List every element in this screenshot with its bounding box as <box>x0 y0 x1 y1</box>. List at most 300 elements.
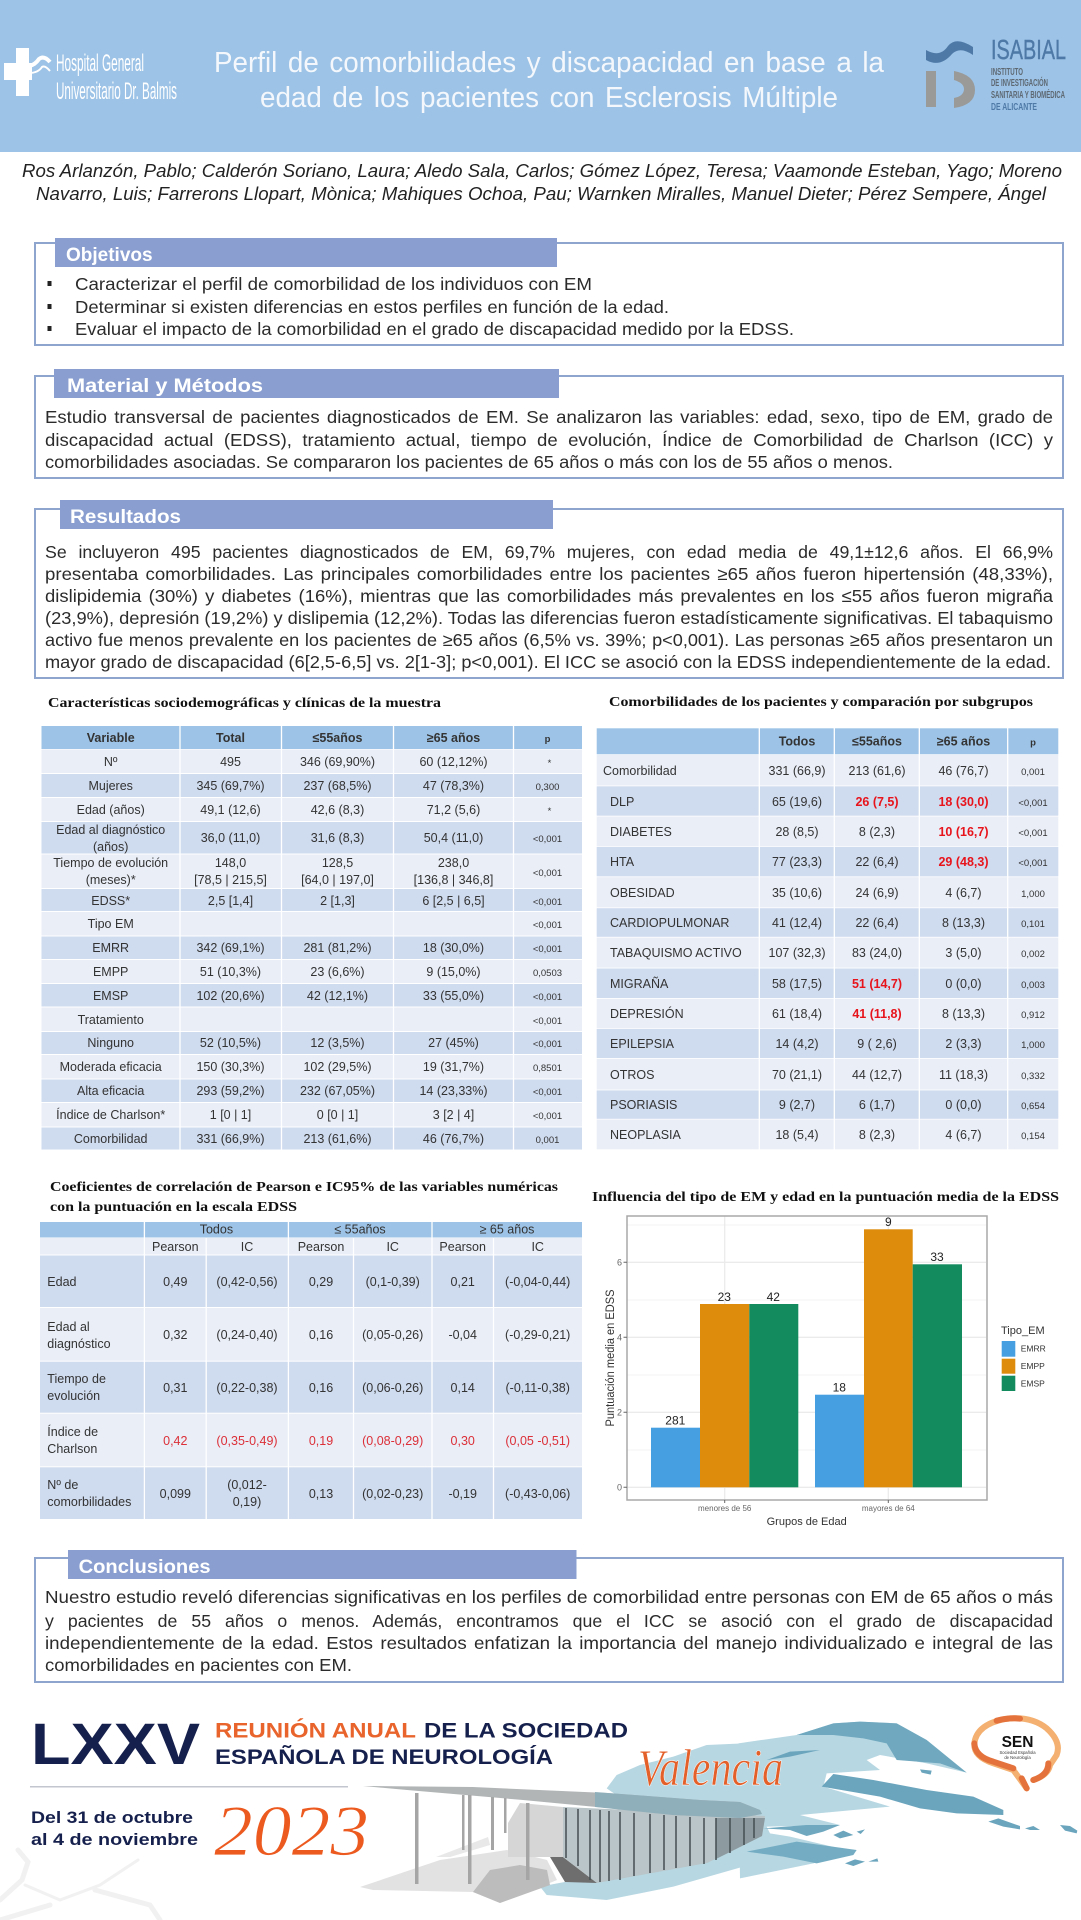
row: TABAQUISMO ACTIVO: 0,002 <box>1021 949 1045 960</box>
row: DIABETES: 8 (2,3) <box>859 825 895 839</box>
row: Edad al diagnóstico: 0,16 <box>309 1328 333 1342</box>
row: Edad: (0,42-0,56) <box>216 1275 278 1289</box>
row: CARDIOPULMONAR: 8 (13,3) <box>942 916 985 930</box>
row: DEPRESIÓN <box>597 999 1058 1028</box>
row: Edad <box>40 1256 582 1307</box>
row: Alta eficacia: Alta eficacia <box>77 1084 144 1098</box>
row: OTROS: 11 (18,3) <box>939 1068 988 1082</box>
row: Edad al diagnóstico: -0,04 <box>448 1328 477 1342</box>
sub header row <box>40 1238 582 1254</box>
title: edad de los pacientes con Esclerosis Múltiple <box>260 82 838 114</box>
row: Edad: (-0,04-0,44) <box>505 1275 570 1289</box>
row: Moderada eficacia: 150 (30,3%) <box>196 1060 265 1074</box>
title <box>214 47 885 114</box>
header banner <box>0 0 1081 152</box>
row: DIABETES: 10 (16,7) <box>938 825 989 839</box>
row: Tiempo de evolución: [64,0 | 197,0] <box>301 873 374 887</box>
row: Alta eficacia: <0,001 <box>533 1087 562 1098</box>
row: Edad al diagnóstico: (-0,29-0,21) <box>505 1328 570 1342</box>
objectives list <box>48 274 794 339</box>
bars: menores de 56: 281 <box>665 1414 686 1428</box>
row: MIGRAÑA: 0 (0,0) <box>945 977 982 991</box>
row: EPILEPSIA: EPILEPSIA <box>610 1037 675 1051</box>
header row: Total <box>216 731 245 745</box>
group header row: ≥ 65 años <box>480 1222 534 1236</box>
row: EMSP: <0,001 <box>533 992 562 1003</box>
title: LXXV reunión anual: REUNIÓN ANUAL <box>215 1718 416 1742</box>
row: OTROS: 70 (21,1) <box>772 1068 822 1082</box>
row: EDSS: 6 [2,5 | 6,5] <box>422 894 485 908</box>
Valencia lettering: Valencia <box>638 1740 783 1797</box>
authors: Navarro, Luis; Farrerons Llopart, Mònica; Mahiques Ochoa, Pau; Warnken Miralles, Manuel Dieter; Pérez Sempere, Ángel <box>36 183 1047 204</box>
row: Tiempo de evolución: 0,14 <box>451 1381 475 1395</box>
title: LXXV reunión anual: DE LA SOCIEDAD <box>424 1720 628 1742</box>
header row: Variable <box>87 731 135 745</box>
y axis: 6 <box>617 1258 622 1268</box>
row: Tiempo de evolución: (0,06-0,26) <box>362 1381 423 1395</box>
row: DEPRESIÓN: DEPRESIÓN <box>610 1006 684 1021</box>
conclusions text: independientemente de la edad. Estos resultados enfatizan la importancia del manejo individualizado e integral de las <box>45 1633 1053 1653</box>
heading: tabla comorbilidades: Comorbilidades de los pacientes y comparación por subgrupos <box>609 695 1034 710</box>
row: EMRR: <0,001 <box>533 944 562 955</box>
panel: conclusiones <box>35 1550 1063 1682</box>
conclusions text: y pacientes de 55 años o menos. Además, encontramos que el ICC se asoció con el grado de discapacidad <box>45 1611 1053 1631</box>
row: Edad al diagnóstico: Edad al diagnóstico <box>56 823 165 837</box>
row: OBESIDAD: 24 (6,9) <box>855 886 899 900</box>
bars: mayores de 64: 9 <box>885 1215 892 1229</box>
row: Tiempo de evolución: (-0,11-0,38) <box>506 1381 570 1395</box>
row: Comorbilidad: 213 (61,6) <box>849 764 905 778</box>
row: Tipo EM: <0,001 <box>533 920 562 931</box>
row: DEPRESIÓN: 0,912 <box>1021 1010 1045 1021</box>
row: Tiempo de evolución: Tiempo de evolución <box>53 856 168 870</box>
legend: Tipo_EM <box>1001 1325 1045 1337</box>
row: EDSS: EDSS* <box>91 894 130 908</box>
row: Alta eficacia <box>42 1080 582 1102</box>
row: Tiempo de evolución: <0,001 <box>533 868 562 879</box>
row: Tiempo de evolución: (0,22-0,38) <box>216 1381 278 1395</box>
y axis: 4 <box>617 1332 622 1342</box>
legend: EMSP <box>1021 1378 1045 1388</box>
logo: SEN: SEN <box>1002 1734 1033 1751</box>
row: OBESIDAD: 35 (10,6) <box>772 886 822 900</box>
row: DLP: <0,001 <box>1018 798 1048 809</box>
row: OTROS <box>597 1059 1058 1090</box>
dates: al 4 de noviembre <box>31 1830 198 1849</box>
row: EMRR: EMRR <box>92 941 129 955</box>
sub header row: Pearson <box>439 1240 486 1254</box>
results text: (23,9%), depresión (19,2%) y dislipemia (12,2%). Todas las diferencias fueron estadísticamente significativas. El tabaquismo <box>45 608 1053 628</box>
row: EMPP <box>42 960 582 983</box>
row: HTA: HTA <box>610 855 635 869</box>
row: Ninguno: <0,001 <box>533 1039 562 1050</box>
row: Alta eficacia: 293 (59,2%) <box>196 1084 265 1098</box>
row: Tiempo de evolución: [136,8 | 346,8] <box>414 873 493 887</box>
footer banner: congress <box>0 1712 1077 1920</box>
row: EMSP: 42 (12,1%) <box>307 989 368 1003</box>
row: Nº: Nº <box>104 755 118 769</box>
heading: tabla correlación <box>50 1180 559 1215</box>
row: Índice de Charlson: 0,42 <box>163 1434 188 1448</box>
row: Mujeres <box>42 774 582 797</box>
row: EMSP: EMSP <box>93 989 128 1003</box>
bars: menores de 56 <box>651 1290 798 1487</box>
row: NEOPLASIA: NEOPLASIA <box>610 1128 682 1142</box>
row: Índice de Charlson: 0,30 <box>451 1434 475 1448</box>
row: Comorbilidad: 0,001 <box>536 1135 559 1146</box>
row: HTA: 22 (6,4) <box>855 855 899 869</box>
row: DEPRESIÓN: 8 (13,3) <box>942 1007 985 1021</box>
row: Edad al diagnóstico <box>40 1308 582 1361</box>
row: EPILEPSIA: 14 (4,2) <box>775 1037 819 1051</box>
row: HTA: <0,001 <box>1018 858 1048 869</box>
row: Tiempo de evolución: 238,0 <box>438 856 469 870</box>
row: CARDIOPULMONAR: 0,101 <box>1021 919 1045 930</box>
row: EMRR: 18 (30,0%) <box>423 941 484 955</box>
row: Nº: 60 (12,12%) <box>419 755 488 769</box>
row: Edad al diagnóstico: Edad al <box>47 1320 90 1334</box>
row: MIGRAÑA: 58 (17,5) <box>772 977 822 991</box>
row: Tiempo de evolución: [78,5 | 215,5] <box>194 873 267 887</box>
row: Edad: 0,29 <box>309 1275 333 1289</box>
row: DIABETES: DIABETES <box>610 825 672 839</box>
row: HTA: 77 (23,3) <box>772 855 822 869</box>
legend: EMRR <box>1021 1344 1046 1354</box>
y axis: 0 <box>617 1482 622 1492</box>
row: EMSP: 102 (20,6%) <box>196 989 265 1003</box>
row: Edad al diagnóstico: 31,6 (8,3) <box>311 831 364 845</box>
table: comorbilidades <box>597 728 1058 1149</box>
row: PSORIASIS: PSORIASIS <box>610 1098 677 1112</box>
title: Perfil de comorbilidades y discapacidad en base a la <box>214 47 885 79</box>
row: Mujeres: 345 (69,7%) <box>196 779 265 793</box>
row: EDSS <box>42 889 582 911</box>
results text: mayor grado de discapacidad (6[2,5-6,5] vs. 2[1-3]; p<0,001). El ICC se asoció con la EDSS independientemente de la edad. <box>45 652 1051 672</box>
brain vein watermark <box>0 1850 160 1920</box>
sub header row: Pearson <box>152 1240 199 1254</box>
row: Tiempo de evolución <box>42 854 582 888</box>
header row: ≤55años <box>313 731 363 745</box>
row: Tiempo de evolución <box>40 1362 582 1413</box>
row: OBESIDAD: 4 (6,7) <box>945 886 982 900</box>
row: Comorbilidad: 213 (61,6%) <box>303 1132 372 1146</box>
row: Moderada eficacia: 0,8501 <box>533 1063 562 1074</box>
row: TABAQUISMO ACTIVO: 83 (24,0) <box>852 946 902 960</box>
row: Comorbilidad: Comorbilidad <box>74 1132 148 1146</box>
row: HTA: 29 (48,3) <box>938 855 989 869</box>
row: Moderada eficacia: 102 (29,5%) <box>303 1060 372 1074</box>
row: TABAQUISMO ACTIVO: 3 (5,0) <box>945 946 982 960</box>
row: EPILEPSIA <box>597 1029 1058 1058</box>
row: Nº de comorbilidades: (0,02-0,23) <box>362 1487 423 1501</box>
row: DLP <box>597 786 1058 816</box>
row: MIGRAÑA <box>597 968 1058 998</box>
row: Índice de Charlson: Índice de Charlson* <box>56 1107 165 1122</box>
building illustration <box>360 1786 765 1903</box>
logo: ISABIAL <box>926 34 1066 113</box>
row: Índice de Charlson: (0,35-0,49) <box>216 1434 278 1448</box>
header row: Todos <box>779 734 815 748</box>
row: DEPRESIÓN: 61 (18,4) <box>772 1007 822 1021</box>
row: DEPRESIÓN: 41 (11,8) <box>852 1007 902 1021</box>
row: Edad: 0,49 <box>163 1275 188 1289</box>
row: EMPP: 23 (6,6%) <box>310 965 365 979</box>
dates: 2023 <box>214 1791 369 1871</box>
bars: menores de 56: 42 <box>767 1290 780 1304</box>
row: Moderada eficacia: Moderada eficacia <box>60 1060 162 1074</box>
row: DLP: 18 (30,0) <box>938 795 989 809</box>
row: Nº de comorbilidades <box>40 1467 582 1519</box>
row: Índice de Charlson: (0,08-0,29) <box>362 1434 423 1448</box>
conclusions text <box>45 1587 1053 1675</box>
sub header row: Pearson <box>298 1240 344 1254</box>
logo: SEN: de Neurología <box>1004 1755 1031 1760</box>
row: EMPP: 51 (10,3%) <box>200 965 261 979</box>
row: EPILEPSIA: 9 ( 2,6) <box>857 1037 897 1051</box>
row: Edad: 71,2 (5,6) <box>427 803 480 817</box>
objectives list: Determinar si existen diferencias en estos perfiles en función de la edad. <box>75 297 669 317</box>
header row: p <box>1030 738 1036 748</box>
header row: p <box>545 734 551 745</box>
x axis: Grupos de Edad <box>767 1516 847 1528</box>
methods text: discapacidad actual (EDSS), tratamiento actual, tiempo de evolución, Índice de Comorbilidad de Charlson (ICC) y <box>45 430 1053 450</box>
x axis <box>698 1500 915 1528</box>
row: Nº: * <box>548 758 552 769</box>
x axis: mayores de 64 <box>862 1504 915 1513</box>
heading: tabla características: Características sociodemográficas y clínicas de la muestra <box>48 696 441 711</box>
row: Nº <box>42 750 582 773</box>
row: MIGRAÑA: 51 (14,7) <box>852 977 902 991</box>
logo: ISABIAL: INSTITUTO <box>991 67 1023 78</box>
y axis: 2 <box>617 1408 622 1418</box>
row: Comorbilidad: 331 (66,9) <box>769 764 825 778</box>
row: DIABETES: 28 (8,5) <box>775 825 819 839</box>
panel: material y métodos <box>35 369 1063 478</box>
row: Edad al diagnóstico: diagnóstico <box>47 1337 111 1351</box>
conclusions text: comorbilidades en pacientes con EM. <box>45 1655 352 1675</box>
row: Nº: 495 <box>220 755 241 769</box>
title: LXXV reunión anual: LXXV <box>31 1712 200 1777</box>
row: Índice de Charlson: 0 [0 | 1] <box>317 1108 358 1122</box>
row: PSORIASIS: 6 (1,7) <box>859 1098 895 1112</box>
row: NEOPLASIA: 0,154 <box>1021 1131 1045 1142</box>
header row: ≤55años <box>852 734 902 748</box>
row: EMPP: 9 (15,0%) <box>426 965 481 979</box>
row: Alta eficacia: 14 (23,33%) <box>419 1084 488 1098</box>
row: EMRR: 342 (69,1%) <box>196 941 265 955</box>
results text: activo fue menos prevalente en los pacientes de ≥65 años (6,5% vs. 39%; p<0,001). Las personas ≥65 años presentaron un <box>45 630 1053 650</box>
row: Edad al diagnóstico: (años) <box>93 840 128 854</box>
row: Ninguno: 12 (3,5%) <box>310 1036 365 1050</box>
row: Edad al diagnóstico: 0,32 <box>163 1328 188 1342</box>
row: Comorbilidad <box>597 755 1058 786</box>
sub header row: IC <box>241 1240 253 1254</box>
panel: objetivos <box>35 238 1063 345</box>
row: OBESIDAD <box>597 877 1058 907</box>
y axis <box>605 1258 627 1492</box>
logo: SEN <box>974 1718 1058 1788</box>
row: OBESIDAD: 1,000 <box>1021 889 1045 900</box>
row: Comorbilidad: 331 (66,9%) <box>196 1132 265 1146</box>
row: EMRR <box>42 936 582 959</box>
row: HTA <box>597 847 1058 876</box>
heading: gráfico: Influencia del tipo de EM y edad en la puntuación media de la EDSS <box>592 1190 1059 1205</box>
row: Índice de Charlson <box>42 1103 582 1126</box>
row: Tratamiento <box>42 1008 582 1031</box>
row: Comorbilidad: 46 (76,7%) <box>423 1132 484 1146</box>
row: DIABETES: <0,001 <box>1018 828 1048 839</box>
row: Edad: 0,21 <box>451 1275 475 1289</box>
row: TABAQUISMO ACTIVO: 107 (32,3) <box>769 946 825 960</box>
panel: resultados <box>35 500 1063 678</box>
row: Comorbilidad: 46 (76,7) <box>938 764 989 778</box>
row: NEOPLASIA: 4 (6,7) <box>945 1128 982 1142</box>
row: Edad: 49,1 (12,6) <box>200 803 261 817</box>
sub header row: IC <box>531 1240 544 1254</box>
bars: mayores de 64: 18 <box>833 1380 846 1394</box>
row: NEOPLASIA: 18 (5,4) <box>775 1128 819 1142</box>
row: DIABETES <box>597 816 1058 846</box>
row: Ninguno: 52 (10,5%) <box>200 1036 261 1050</box>
row: Tipo EM: Tipo EM <box>88 917 134 931</box>
row: Índice de Charlson <box>40 1414 582 1466</box>
row: EMSP: 33 (55,0%) <box>423 989 484 1003</box>
row: OTROS: OTROS <box>610 1068 654 1082</box>
row: EPILEPSIA: 1,000 <box>1021 1040 1045 1051</box>
sub header row: IC <box>386 1240 399 1254</box>
group header row: ≤ 55años <box>334 1222 386 1236</box>
heading: Resultados <box>60 500 553 529</box>
row: CARDIOPULMONAR: 41 (12,4) <box>772 916 822 930</box>
title: LXXV reunión anual: ESPAÑOLA DE NEUROLOGÍA <box>215 1746 553 1769</box>
row: Índice de Charlson: (0,05 -0,51) <box>505 1434 570 1448</box>
dates: Del 31 de octubre <box>31 1808 193 1827</box>
row: Tiempo de evolución: 0,16 <box>309 1381 333 1395</box>
row: Edad al diagnóstico: <0,001 <box>533 834 562 845</box>
title: LXXV reunión anual <box>31 1712 628 1777</box>
results text: dislipidemia (30%) y diabetes (16%), mientras que las comorbilidades más prevalentes en los ≤55 años fueron migraña <box>45 586 1053 606</box>
watercolor splash <box>540 1722 1077 1900</box>
row: Índice de Charlson: Índice de <box>47 1424 98 1439</box>
logo: Hospital General Universitario Dr. Balmis <box>4 48 177 105</box>
row: Edad: * <box>548 806 552 817</box>
bars: mayores de 64 <box>815 1215 962 1487</box>
row: Mujeres: 237 (68,5%) <box>303 779 372 793</box>
row: Tipo EM <box>42 912 582 936</box>
row: Índice de Charlson: 0,19 <box>309 1434 333 1448</box>
row: Ninguno: 27 (45%) <box>428 1036 479 1050</box>
row: PSORIASIS <box>597 1090 1058 1119</box>
row: EMPP: EMPP <box>93 965 128 979</box>
row: Nº de comorbilidades: (0,012- <box>227 1478 267 1492</box>
results text: presentaba comorbilidades. Las principales comorbilidades entre los pacientes ≥65 años fueron hipertensión (48,33%), <box>45 564 1053 584</box>
bars: menores de 56: 23 <box>718 1290 731 1304</box>
row: Edad al diagnóstico: (0,24-0,40) <box>216 1328 278 1342</box>
row: Tiempo de evolución: evolución <box>47 1389 100 1403</box>
methods text: comorbilidades asociadas. Se compararon los pacientes de 65 años o más con los de 55 años o menos. <box>45 452 893 472</box>
row: Edad al diagnóstico: 36,0 (11,0) <box>201 831 260 845</box>
row: OBESIDAD: OBESIDAD <box>610 886 675 900</box>
heading: Resultados: Resultados <box>70 507 181 528</box>
heading: tabla correlación: con la puntuación en la escala EDSS <box>50 1200 297 1215</box>
legend <box>1001 1325 1046 1391</box>
row: Mujeres: Mujeres <box>88 779 133 793</box>
table: características sociodemográficas <box>42 726 582 1150</box>
header row: ≥65 años <box>937 734 990 748</box>
row: TABAQUISMO ACTIVO <box>597 938 1058 968</box>
row: CARDIOPULMONAR: 22 (6,4) <box>855 916 899 930</box>
row: Índice de Charlson: <0,001 <box>533 1111 562 1122</box>
row: Índice de Charlson: 1 [0 | 1] <box>210 1108 251 1122</box>
row: EPILEPSIA: 2 (3,3) <box>945 1037 982 1051</box>
row: EMPP: 0,0503 <box>533 968 562 979</box>
results text <box>45 542 1053 672</box>
row: Edad al diagnóstico: 50,4 (11,0) <box>424 831 483 845</box>
row: Edad <box>42 798 582 821</box>
row: Tiempo de evolución: 128,5 <box>322 856 353 870</box>
row: Tratamiento: Tratamiento <box>78 1013 144 1027</box>
x axis: menores de 56 <box>698 1504 752 1513</box>
conclusions text: Nuestro estudio reveló diferencias significativas en los perfiles de comorbilidad entre personas con EM de 65 años o más <box>45 1587 1053 1607</box>
header row <box>42 726 582 749</box>
row: Índice de Charlson: 3 [2 | 4] <box>433 1108 474 1122</box>
row: Ninguno <box>42 1032 582 1054</box>
row: Nº de comorbilidades: 0,13 <box>309 1487 333 1501</box>
row: Moderada eficacia <box>42 1055 582 1078</box>
row: PSORIASIS: 0 (0,0) <box>945 1098 982 1112</box>
row: DLP: 26 (7,5) <box>855 795 899 809</box>
row: Edad: Edad (años) <box>77 803 145 817</box>
row: Nº: 346 (69,90%) <box>300 755 375 769</box>
row: PSORIASIS: 9 (2,7) <box>779 1098 815 1112</box>
header row: ≥65 años <box>427 731 480 745</box>
row: CARDIOPULMONAR <box>597 908 1058 937</box>
row: Edad: Edad <box>47 1275 77 1289</box>
heading: Material y Métodos <box>54 369 559 398</box>
table: correlación de Pearson <box>40 1222 582 1519</box>
dates <box>31 1791 369 1871</box>
logo: SEN: Sociedad Española <box>999 1750 1036 1755</box>
row: Tiempo de evolución: Tiempo de <box>47 1372 106 1386</box>
row: OTROS: 44 (12,7) <box>852 1068 902 1082</box>
row: Tiempo de evolución: 0,31 <box>163 1381 188 1395</box>
row: Edad al diagnóstico <box>42 822 582 854</box>
row: Índice de Charlson: Charlson <box>47 1442 97 1456</box>
row: Comorbilidad: 0,001 <box>1021 767 1045 778</box>
header banner: Universitario Dr. Balmis <box>56 78 177 105</box>
row: Edad: (0,1-0,39) <box>366 1275 420 1289</box>
row: PSORIASIS: 0,654 <box>1021 1101 1045 1112</box>
row: MIGRAÑA: 0,003 <box>1021 980 1045 991</box>
heading: Material y Métodos: Material y Métodos <box>67 376 263 397</box>
heading: Objetivos <box>55 238 557 267</box>
row: Tiempo de evolución: (meses)* <box>86 873 136 887</box>
row: Tiempo de evolución: 148,0 <box>215 856 246 870</box>
row: DLP: 65 (19,6) <box>772 795 822 809</box>
row: OTROS: 0,332 <box>1021 1071 1045 1082</box>
row: Ninguno: Ninguno <box>87 1036 134 1050</box>
row: MIGRAÑA: MIGRAÑA <box>610 977 669 991</box>
objectives list: Caracterizar el perfil de comorbilidad de los individuos con EM <box>75 274 592 294</box>
row: EDSS: <0,001 <box>533 897 562 908</box>
row: Nº de comorbilidades: (-0,43-0,06) <box>505 1487 570 1501</box>
objectives list: Evaluar el impacto de la comorbilidad en el grado de discapacidad medido por la EDSS. <box>75 319 794 339</box>
row: Mujeres: 0,300 <box>536 782 559 793</box>
row: EMSP <box>42 984 582 1006</box>
bar chart: EDSS media por tipo de EM y edad <box>605 1215 1046 1528</box>
methods text: Estudio transversal de pacientes diagnosticados de EM. Se analizaron las variables: edad, sexo, tipo de EM, grado de <box>45 407 1053 427</box>
legend: EMPP <box>1021 1361 1045 1371</box>
